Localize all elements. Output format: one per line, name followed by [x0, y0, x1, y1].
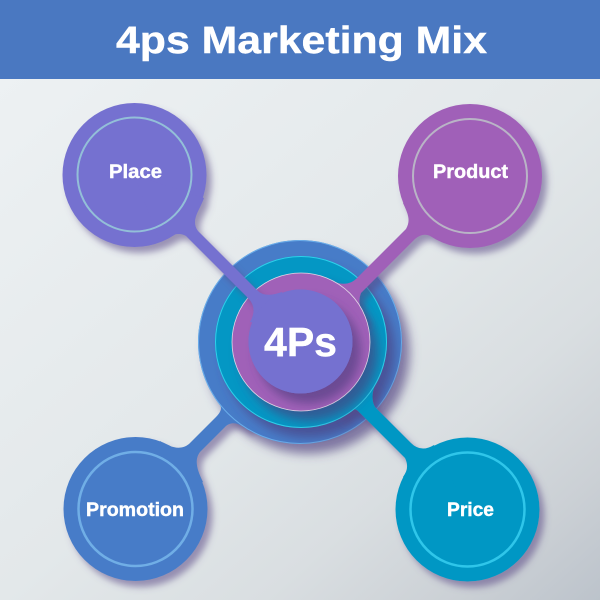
- Price label: Price: [447, 500, 494, 521]
- Price inner ring: [410, 452, 524, 566]
- node: Product with purple ring: [232, 104, 542, 411]
- header banner: [0, 0, 600, 79]
- Place inner ring: [78, 118, 192, 232]
- title: 4ps Marketing Mix: [116, 20, 487, 62]
- Place label: Place: [109, 162, 162, 183]
- Product label: Product: [433, 162, 509, 183]
- Product inner ring: [413, 119, 527, 233]
- Promotion label: Promotion: [86, 500, 184, 521]
- centre label: 4Ps: [264, 319, 337, 365]
- Promotion inner ring: [78, 452, 192, 566]
- node: Place with centre circle: [62, 103, 352, 394]
- node: Price with teal ring: [215, 256, 540, 582]
- node: Promotion with outer blue ring: [64, 240, 402, 581]
